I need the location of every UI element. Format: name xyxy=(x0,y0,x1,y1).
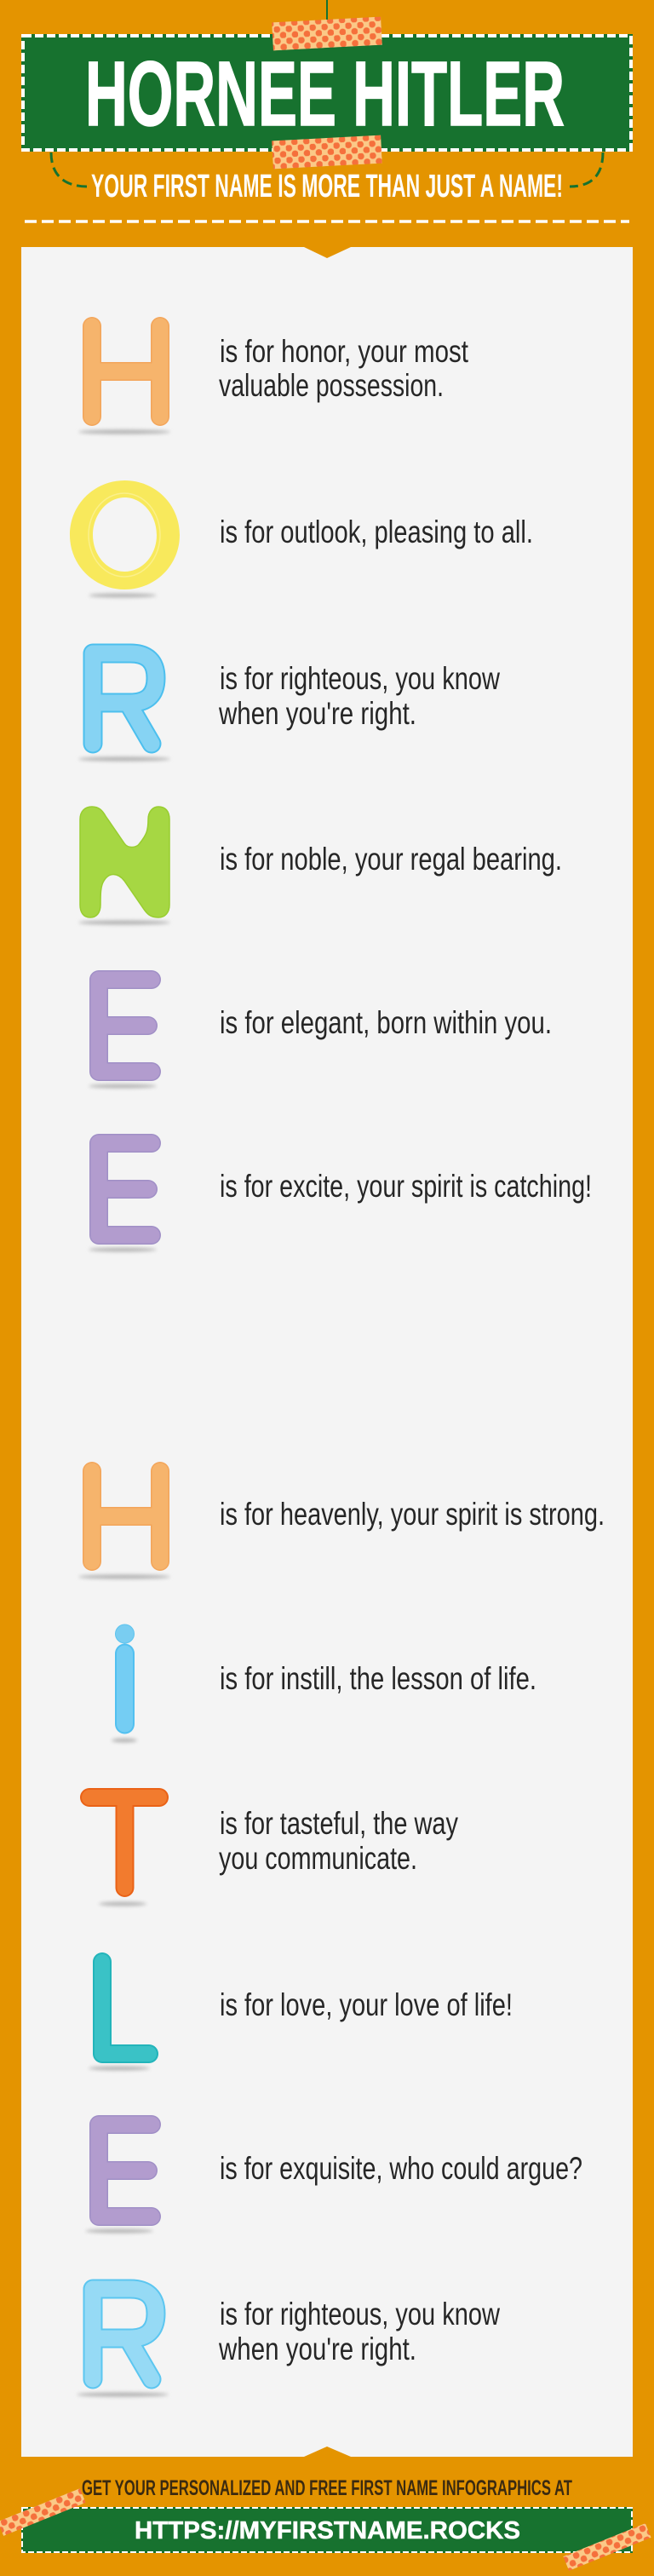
right dashed bracket xyxy=(570,152,603,187)
icon: shadow xyxy=(78,1574,170,1579)
icon: left footer tape xyxy=(0,2488,86,2536)
text: is for elegant, born within you. xyxy=(220,1005,552,1040)
icon: right footer tape xyxy=(563,2523,651,2571)
text: you communicate. xyxy=(219,1841,417,1876)
icon: shadow xyxy=(78,429,170,434)
icon: gel letter O xyxy=(70,480,180,589)
text: is for righteous, you know xyxy=(220,661,500,696)
text: is for love, your love of life! xyxy=(220,1987,513,2022)
icon: gel letter R xyxy=(93,653,156,744)
text: when you're right. xyxy=(218,2332,416,2366)
row: letter L love xyxy=(89,1962,513,2070)
text: when you're right. xyxy=(218,696,416,731)
text: is for righteous, you know xyxy=(220,2297,500,2332)
icon: gel letter E xyxy=(99,980,152,1072)
icon: gel letter E xyxy=(99,2125,152,2217)
icon: shadow xyxy=(99,1902,146,1906)
text: is for noble, your regal bearing. xyxy=(220,842,562,877)
icon: gel letter I xyxy=(116,1624,135,1724)
text xyxy=(219,334,469,403)
icon: shadow xyxy=(77,2392,169,2397)
text xyxy=(219,1806,458,1876)
row: letter O outlook xyxy=(70,480,533,597)
icon: gel letter L xyxy=(102,1962,149,2054)
icon: top washi tape xyxy=(272,17,382,50)
left dashed bracket xyxy=(51,152,88,187)
row: letter H heavenly xyxy=(78,1471,605,1579)
text xyxy=(218,2297,500,2366)
row: letter E elegant xyxy=(89,980,552,1088)
row: letter E excite xyxy=(89,1143,592,1251)
text: is for outlook, pleasing to all. xyxy=(220,515,533,549)
text xyxy=(218,661,500,731)
text: is for honor, your most xyxy=(220,334,469,369)
panel: footer url banner xyxy=(21,2507,633,2553)
row: letter E exquisite xyxy=(85,2125,582,2233)
row: letter H honor xyxy=(78,326,469,434)
row: letter T tasteful xyxy=(89,1797,458,1906)
icon: shadow xyxy=(78,920,170,925)
panel: header banner xyxy=(21,0,633,152)
icon: shadow xyxy=(112,1739,137,1742)
row: letter R righteous xyxy=(78,653,500,762)
icon: gel letter T xyxy=(89,1797,159,1888)
icon: gel letter E xyxy=(99,1143,152,1235)
icon: gel letter R xyxy=(93,2289,156,2379)
row: letter I instill xyxy=(112,1624,536,1742)
icon: gel letter H xyxy=(92,326,160,417)
icon: shadow xyxy=(85,2229,153,2233)
row: letter R righteous xyxy=(77,2289,500,2397)
row: letter N noble xyxy=(78,807,562,925)
text: is for tasteful, the way xyxy=(220,1806,458,1841)
url: HTTPS://MYFIRSTNAME.ROCKS xyxy=(135,2517,520,2544)
text: valuable possession. xyxy=(219,368,444,403)
icon: gel letter N xyxy=(80,807,169,917)
icon: shadow xyxy=(78,756,170,762)
icon: shadow xyxy=(89,1084,157,1088)
icon: shadow xyxy=(89,594,157,597)
icon: shadow xyxy=(89,2067,150,2070)
icon: shadow xyxy=(89,1248,157,1251)
text: is for instill, the lesson of life. xyxy=(220,1661,536,1696)
icon: gel letter H xyxy=(92,1471,160,1561)
icon: lower washi tape xyxy=(272,135,382,169)
